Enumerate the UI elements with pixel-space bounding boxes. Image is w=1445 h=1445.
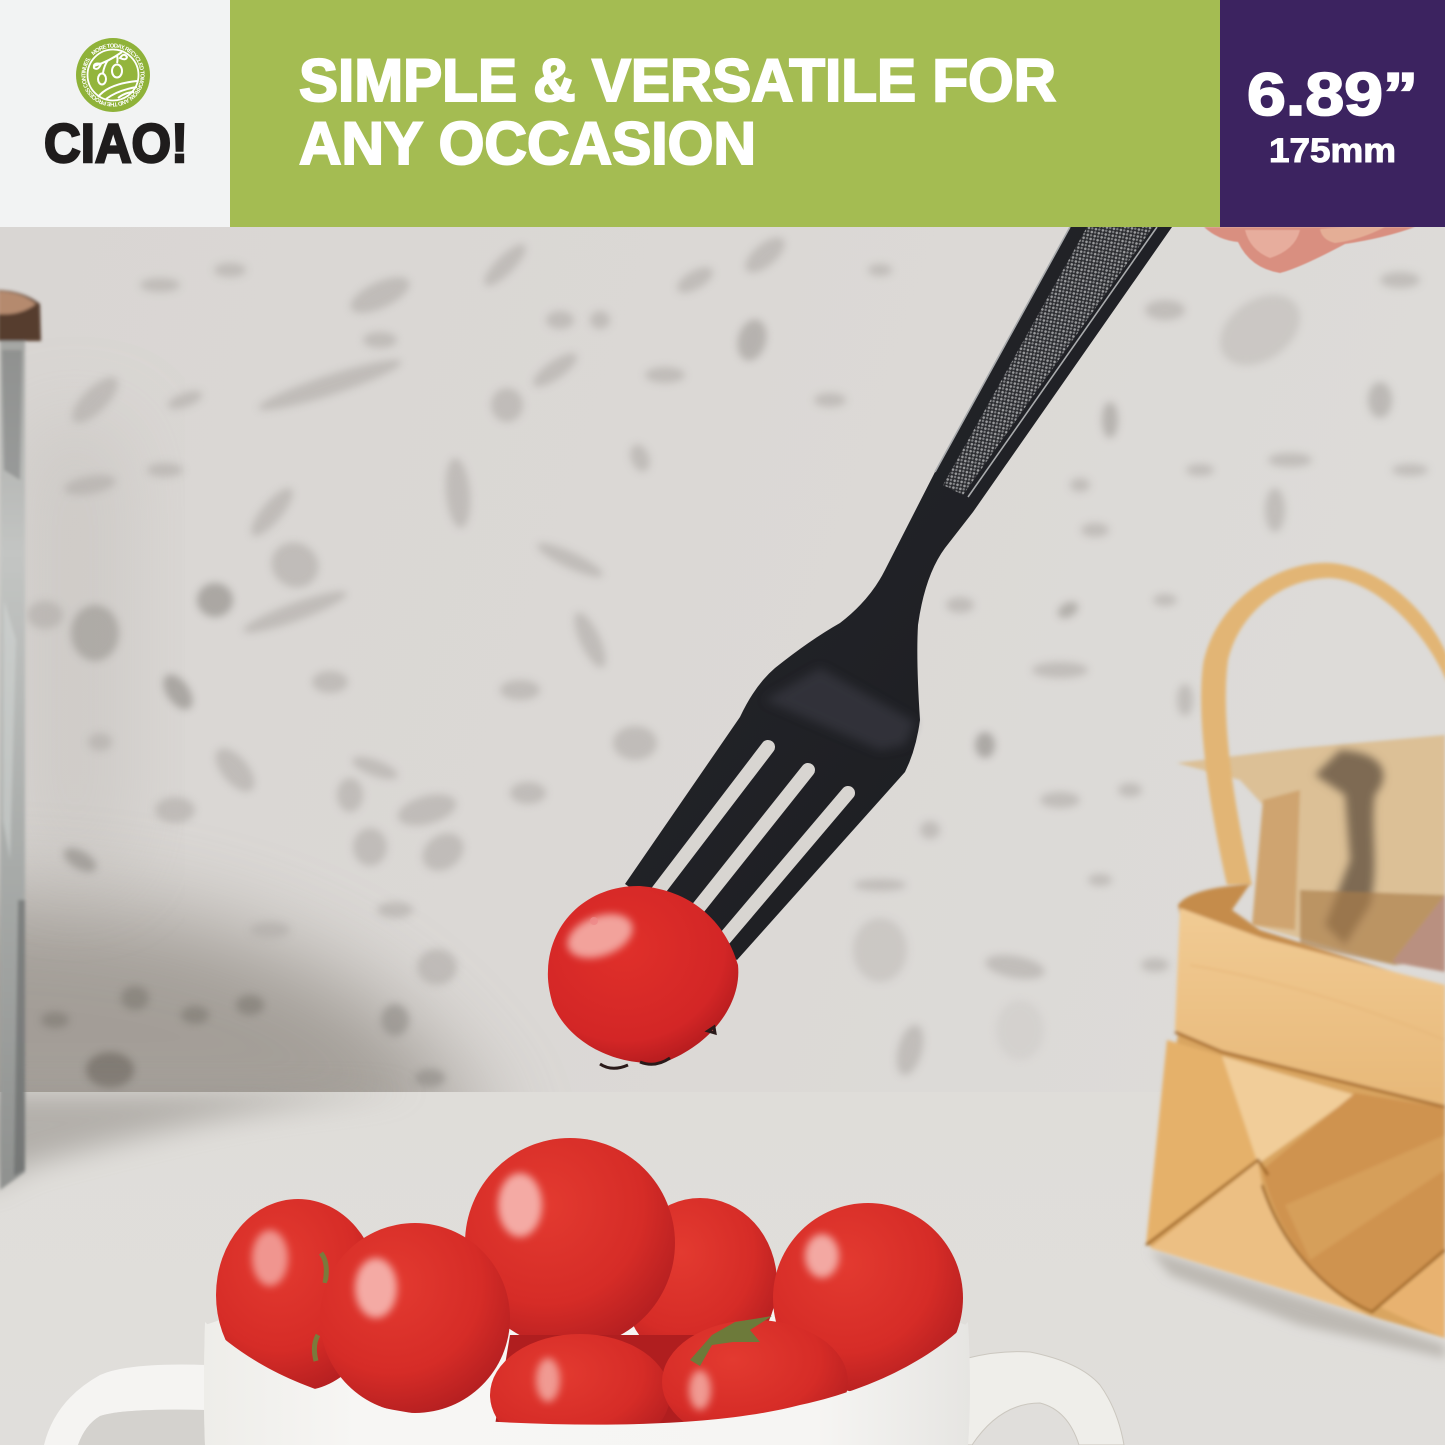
woven wooden basket [1146,563,1445,1358]
jar at left edge [0,290,41,1190]
length in millimetres: 175mm [1269,132,1396,170]
tomato on fork [548,886,738,1068]
logo badge: MORE TODAY, RECYCLED TOMORROW, AND THE PROCESS CONTINUES. [82,44,145,107]
drips [600,1027,715,1068]
bowl handles [44,1364,208,1445]
tomatoes shaded gap [495,1335,790,1425]
logo wordmark: CIAO! [44,112,188,174]
tine slots [655,747,848,938]
panel: size badge [1220,0,1445,227]
fork [625,227,1172,960]
fork head sheen [765,668,915,750]
bowl body [204,1300,970,1445]
lower weave panels [1146,1040,1262,1245]
headline: ANY OCCASION [299,110,756,177]
photo background: terrazzo wall [0,227,1445,1150]
hand holding fork [1204,227,1415,273]
basket handle [1201,563,1445,885]
panel: headline banner [230,0,1220,227]
headline: SIMPLE & VERSATILE FOR [299,47,1056,114]
basket body [1146,884,1445,1338]
paper in basket [1177,735,1445,972]
jar lid [0,290,41,341]
headline [299,47,1056,177]
jar mottling [2,350,22,480]
fork silhouette [625,227,1172,960]
white bowl with handles [44,1300,1124,1445]
wall speckles [27,231,1428,1088]
cherry tomatoes in bowl [204,1138,970,1445]
panel: logo [0,0,230,227]
highlight [561,906,639,966]
basket shadow [1150,1250,1445,1358]
textured handle panel [943,227,1153,495]
tomato stem [690,1316,772,1366]
bowl front lip [204,1322,970,1445]
length in inches: 6.89” [1247,61,1418,128]
table surface [0,1092,1445,1445]
